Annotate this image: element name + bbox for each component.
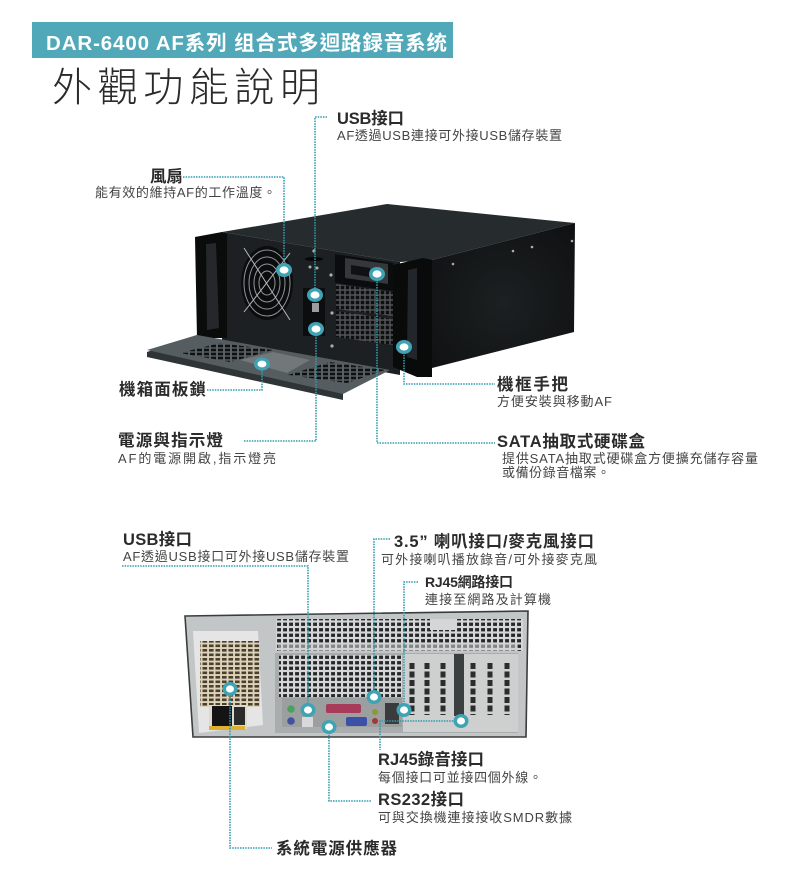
sata drive bay (335, 254, 393, 291)
left handle (195, 232, 227, 338)
label: front panel lock: 機箱面板鎖 (119, 379, 206, 399)
label: fan (95, 167, 276, 200)
psu vent (200, 641, 260, 707)
fan (241, 246, 293, 320)
recessed bay (275, 653, 518, 733)
front lid (147, 335, 390, 400)
leader lines (122, 117, 495, 848)
front chassis photo (147, 204, 575, 400)
label: speaker and microphone: 可外接喇叭播放錄音/可外接麥克風 (381, 552, 597, 567)
middle vents (279, 655, 402, 697)
left handle grip (206, 243, 219, 330)
right handle (393, 258, 432, 377)
label: chassis handle: 方便安裝與移動AF (497, 394, 612, 409)
lid vents right (288, 362, 385, 383)
label: fan: 能有效的維持AF的工作溫度。 (95, 185, 276, 200)
front panel screws (308, 240, 573, 353)
label: chassis handle (497, 374, 612, 409)
psu plate (193, 631, 263, 733)
label: front usb: AF透過USB連接可外接USB儲存裝置 (337, 128, 562, 143)
label: power and indicator: AF的電源開啟,指示燈亮 (118, 451, 276, 466)
expansion slots (403, 654, 518, 732)
top vents (276, 619, 523, 651)
label: sata drive box: SATA抽取式硬碟盒 (497, 431, 646, 451)
label: front usb: USB接口 (337, 109, 404, 128)
callout markers (222, 263, 468, 734)
label: rear usb: AF透過USB接口可外接USB儲存裝置 (123, 549, 349, 564)
rear outer frame (185, 611, 528, 737)
header banner (32, 22, 453, 58)
label: sata drive box (497, 431, 758, 480)
io panel (282, 698, 402, 727)
usb and power panel (303, 257, 325, 336)
label: recording port (378, 749, 542, 785)
label: speaker and microphone (381, 532, 597, 567)
label: power supply: 系統電源供應器 (276, 838, 398, 858)
label: sata drive box: 或備份錄音檔案。 (502, 465, 610, 480)
label: sata drive box: 提供SATA抽取式硬碟盒方便擴充儲存容量 (502, 451, 758, 466)
label: front usb (337, 109, 562, 143)
label: network port (425, 574, 551, 607)
label: rs232: RS232接口 (378, 790, 464, 809)
lid centre plate (240, 352, 310, 373)
label: speaker and microphone: 3.5” 喇叭接口/麥克風接口 (394, 532, 594, 551)
label: rear usb (123, 530, 349, 564)
lid vents left (180, 343, 273, 362)
label: rear usb: USB接口 (123, 530, 192, 549)
drive bay vents (336, 284, 393, 316)
label: power and indicator: 電源與指示燈 (118, 431, 224, 450)
rear chassis photo (185, 611, 528, 737)
power socket (209, 705, 247, 730)
label: power and indicator (118, 431, 276, 466)
chassis right side (432, 223, 575, 368)
lower vents (336, 311, 393, 345)
chassis top face (222, 204, 575, 262)
label: network port: 連接至網路及計算機 (425, 592, 551, 607)
label: recording port: RJ45錄音接口 (378, 749, 484, 769)
header banner: DAR-6400 AF系列 组合式多迴路録音系统 (46, 31, 447, 55)
right handle grip (407, 268, 417, 360)
label: recording port: 每個接口可並接四個外線。 (378, 770, 542, 785)
label: rs232 (378, 790, 572, 825)
label: rs232: 可與交換機連接接收SMDR數據 (378, 810, 572, 825)
chassis front face (222, 232, 400, 375)
label: network port: RJ45網路接口 (425, 574, 513, 590)
label: chassis handle: 機框手把 (497, 374, 568, 394)
page title: 外觀功能說明 (52, 66, 320, 110)
label: fan: 風扇 (150, 167, 183, 186)
